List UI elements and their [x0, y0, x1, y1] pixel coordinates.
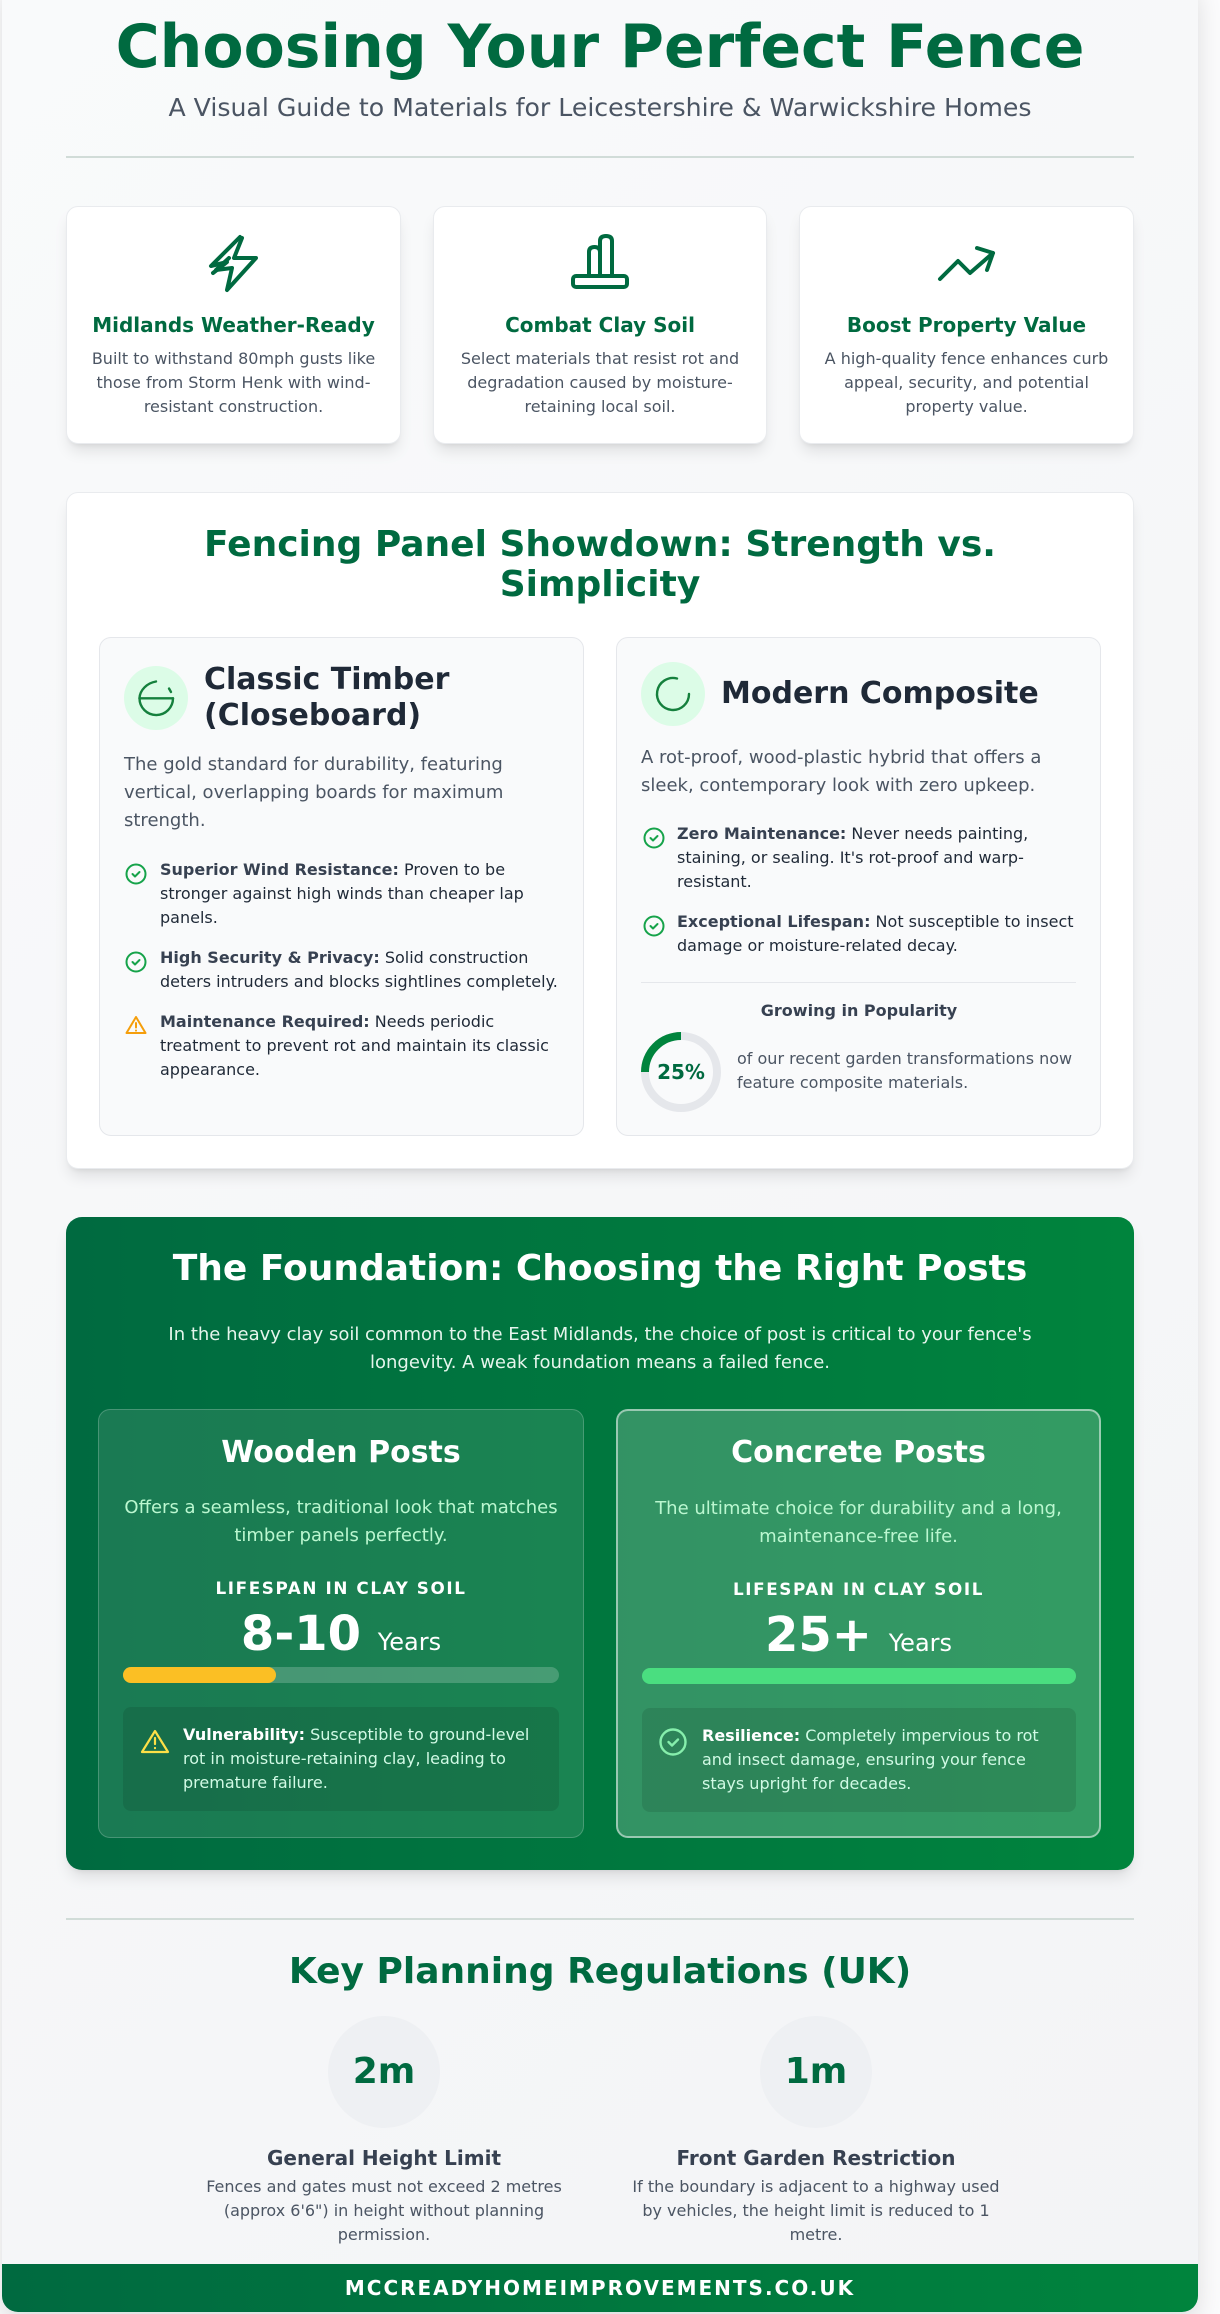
popularity text: of our recent garden transformations now: [737, 1049, 1072, 1068]
regulation text: [632, 2177, 1000, 2244]
donut chart: 25%: 25%: [657, 1060, 705, 1084]
intro text: In the heavy clay soil common to the East Midlands, the choice of post is critical to your fence's: [168, 1324, 1032, 1345]
heading: Fencing Panel Showdown: Strength vs.: [204, 524, 996, 565]
panel: fencing panel showdown: [66, 492, 1134, 1169]
panel: boost property value: [799, 206, 1134, 444]
popularity text: [737, 1049, 1072, 1092]
heading: Classic Timber: [204, 662, 449, 697]
description: sleek, contemporary look with zero upkeep.: [641, 775, 1035, 796]
panel: combat clay soil: [433, 206, 767, 444]
heading: planning regulations: Key Planning Regulations (UK): [289, 1951, 911, 1992]
heading: Wooden Posts: [221, 1435, 461, 1470]
list item: Exceptional Lifespan: Not susceptible to insect: [677, 912, 1074, 931]
callout text: [183, 1725, 529, 1792]
description: Offers a seamless, traditional look that matches: [124, 1497, 558, 1518]
card text: [92, 349, 375, 416]
callout text: [702, 1726, 1039, 1793]
intro text: [168, 1324, 1032, 1373]
card text: retaining local soil.: [524, 397, 676, 416]
regulation text: If the boundary is adjacent to a highway used: [632, 2177, 1000, 2196]
list item: Maintenance Required: Needs periodic: [160, 1012, 494, 1031]
panel: modern composite: [616, 637, 1101, 1136]
list item: appearance.: [160, 1060, 260, 1079]
icon: check: [644, 916, 664, 936]
icon: check: [644, 828, 664, 848]
list item: resistant.: [677, 872, 752, 891]
card text: Select materials that resist rot and: [461, 349, 739, 368]
regulation text: metre.: [790, 2225, 842, 2244]
list item: Zero Maintenance: Never needs painting,: [677, 824, 1028, 843]
heading: Simplicity: [500, 564, 700, 605]
callout text: stays upright for decades.: [702, 1774, 911, 1793]
description: maintenance-free life.: [759, 1526, 958, 1547]
list item: High Security & Privacy: Solid construction: [160, 948, 528, 967]
card text: [461, 349, 739, 416]
panel: classic timber: [99, 637, 584, 1136]
list item: Superior Wind Resistance: Proven to be: [160, 860, 505, 879]
intro text: longevity. A weak foundation means a failed fence.: [370, 1352, 830, 1373]
heading: [204, 524, 996, 605]
icon: warning: [140, 1730, 170, 1754]
popularity heading: Growing in Popularity: [761, 1001, 957, 1020]
list item: stronger against high winds than cheaper lap: [160, 884, 524, 903]
heading: The Foundation: Choosing the Right Posts: [173, 1248, 1027, 1289]
callout text: Vulnerability: Susceptible to ground-level: [183, 1725, 529, 1744]
panel: foundation posts: [66, 1217, 1134, 1870]
card heading: Boost Property Value: [847, 313, 1086, 337]
badge: 2m: [328, 2016, 440, 2128]
regulation text: Fences and gates must not exceed 2 metres: [206, 2177, 562, 2196]
list item: panels.: [160, 908, 218, 927]
list item: deters intruders and blocks sightlines completely.: [160, 972, 558, 991]
callout text: and insect damage, ensuring your fence: [702, 1750, 1026, 1769]
icon: composite circle: [641, 662, 705, 726]
icon: check: [126, 864, 146, 884]
description: [641, 747, 1041, 796]
footer: [2, 2264, 1198, 2312]
description: timber panels perfectly.: [234, 1525, 448, 1546]
list item: [160, 948, 558, 991]
description: strength.: [124, 810, 206, 831]
footer: MCCREADYHOMEIMPROVEMENTS.CO.UK: [345, 2276, 855, 2300]
badge: 1m: 1m: [785, 2051, 847, 2092]
callout text: premature failure.: [183, 1773, 328, 1792]
badge: 2m: 2m: [353, 2051, 415, 2092]
lifespan label: LIFESPAN IN CLAY SOIL: [733, 1579, 984, 1599]
title: Choosing Your Perfect Fence: [116, 12, 1084, 82]
icon: lightning bolt: [208, 234, 258, 292]
card text: property value.: [905, 397, 1028, 416]
card text: A high-quality fence enhances curb: [825, 349, 1108, 368]
lifespan bar: [123, 1667, 559, 1683]
list item: treatment to prevent rot and maintain its classic: [160, 1036, 549, 1055]
list item: damage or moisture-related decay.: [677, 936, 958, 955]
regulation: front garden restriction: [632, 2051, 1000, 2244]
card text: Built to withstand 80mph gusts like: [92, 349, 375, 368]
subtitle: A Visual Guide to Materials for Leicestershire & Warwickshire Homes: [168, 93, 1032, 122]
card text: degradation caused by moisture-: [467, 373, 733, 392]
callout text: rot in moisture-retaining clay, leading to: [183, 1749, 506, 1768]
list item: staining, or sealing. It's rot-proof and warp-: [677, 848, 1024, 867]
description: The ultimate choice for durability and a long,: [655, 1498, 1062, 1519]
lifespan label: LIFESPAN IN CLAY SOIL: [216, 1578, 466, 1598]
icon: trend arrow: [938, 246, 996, 282]
regulation text: by vehicles, the height limit is reduced to 1: [642, 2201, 990, 2220]
regulation: general height limit: [206, 2051, 562, 2244]
description: vertical, overlapping boards for maximum: [124, 782, 503, 803]
lifespan value: 25+ Years: [765, 1607, 952, 1663]
heading: [204, 662, 450, 733]
popularity text: feature composite materials.: [737, 1073, 968, 1092]
lifespan bar: [642, 1668, 1076, 1684]
list item: [677, 824, 1028, 891]
icon: check: [659, 1728, 687, 1756]
badge: 1m: [760, 2016, 872, 2128]
panel: wooden posts: [98, 1409, 584, 1838]
heading: (Closeboard): [204, 698, 421, 733]
heading: Concrete Posts: [731, 1435, 986, 1470]
regulation text: permission.: [338, 2225, 430, 2244]
description: A rot-proof, wood-plastic hybrid that offers a: [641, 747, 1041, 768]
heading: Modern Composite: [721, 676, 1039, 711]
callout: vulnerability: [123, 1707, 559, 1811]
regulation heading: General Height Limit: [267, 2146, 501, 2170]
icon: check: [126, 952, 146, 972]
list item: [677, 912, 1074, 955]
description: [124, 1497, 558, 1546]
regulation text: (approx 6'6") in height without planning: [224, 2201, 544, 2220]
icon: fence post in ground: [571, 234, 629, 289]
card text: [824, 349, 1108, 416]
callout text: Resilience: Completely impervious to rot: [702, 1726, 1039, 1745]
callout: resilience: [642, 1708, 1076, 1812]
regulation heading: Front Garden Restriction: [676, 2146, 956, 2170]
icon: timber circle: [124, 666, 188, 730]
icon: warning: [126, 1016, 146, 1034]
list item: [160, 1012, 549, 1079]
donut chart: 25%: [641, 1032, 721, 1112]
card text: those from Storm Henk with wind-: [96, 373, 370, 392]
card heading: Combat Clay Soil: [505, 313, 695, 337]
card text: resistant construction.: [144, 397, 323, 416]
panel: concrete posts: [616, 1409, 1101, 1838]
card text: appeal, security, and potential: [844, 373, 1089, 392]
list item: [160, 860, 524, 927]
lifespan value: 8-10 Years: [241, 1606, 441, 1662]
description: [655, 1498, 1062, 1547]
description: The gold standard for durability, featuring: [124, 754, 503, 775]
panel: midlands weather-ready: [66, 206, 401, 444]
card heading: Midlands Weather-Ready: [92, 313, 375, 337]
description: [124, 754, 503, 831]
regulation text: [206, 2177, 562, 2244]
